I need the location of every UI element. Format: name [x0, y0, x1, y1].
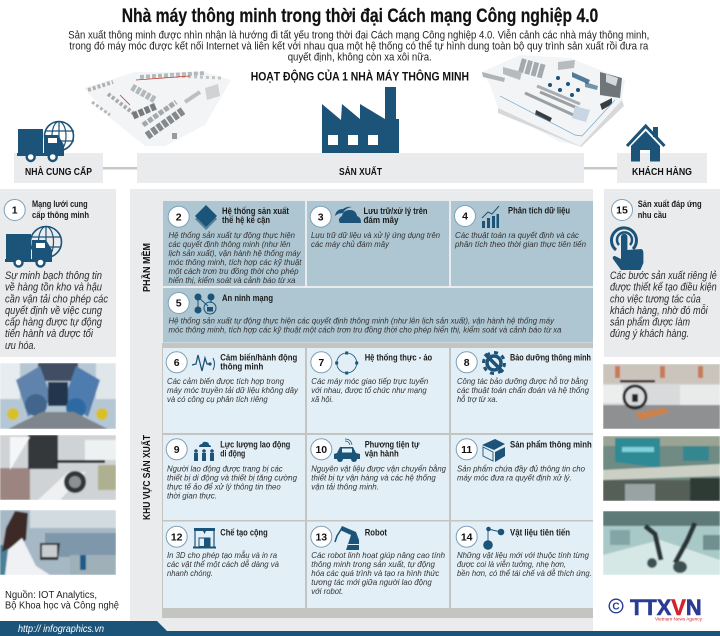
cell 14: Những vật liệu mới với thuộc tính từng [457, 550, 589, 560]
cell 11 [451, 435, 593, 520]
cell 13: với robot. [311, 586, 343, 596]
source note: Nguồn: IOT Analytics, [5, 589, 97, 601]
cell 14: được coi là viễn tưởng, nhẹ hơn, [457, 559, 566, 569]
cell 2: thế hệ kế cận [222, 215, 270, 225]
cell 11: máy móc đưa ra quyết định xử lý. [457, 473, 572, 483]
cell 7: Hệ thống thực - ảo [365, 353, 433, 363]
cell 2: các quyết định thông minh (như lên [168, 239, 291, 249]
cell 12: 12 [171, 531, 183, 543]
cell 8: Công tác bảo dưỡng được hỗ trợ bằng [457, 376, 588, 386]
icon: cyber-physical ring [335, 352, 358, 374]
intro text [68, 28, 649, 63]
cell 2: Hệ thống sản xuất [222, 206, 289, 216]
illustration: factory floor right [482, 55, 625, 147]
cell 6: máy móc truyền tải dữ liệu không dây [167, 385, 299, 395]
icon: truck and globe [5, 226, 62, 266]
logo: TTXVN: TTXVN [630, 595, 702, 620]
cell 9: thời gian thực. [167, 491, 217, 501]
number 1 [4, 200, 25, 220]
cell 8: các thuật toán chẩn đoán và hệ thống [457, 385, 589, 395]
panel: supplier [0, 189, 116, 357]
cell 14 [451, 522, 593, 608]
cell 6: 6 [174, 357, 180, 369]
cell 2 [163, 201, 305, 286]
cell 8 [451, 348, 593, 433]
photo: drone in plant [0, 435, 116, 500]
cell 2: móc thông minh, tích hợp các kỹ thuật [168, 257, 302, 267]
cell 7: 7 [318, 357, 324, 369]
cell 10: vận tải thông minh. [311, 482, 379, 492]
cell 5: 5 [176, 298, 182, 310]
icon: bar chart [482, 206, 499, 228]
cell 4: phân tích theo thời gian thực tiên tiến [454, 239, 586, 249]
cell 10 [307, 435, 449, 520]
icon: network lock [194, 294, 216, 314]
cell 6: và có công cụ phân tích riêng [167, 394, 268, 404]
footer bar: http:// infographics.vn [18, 623, 104, 635]
cell 13: Robot [365, 528, 387, 538]
supplier heading: cấp thông minh [32, 210, 89, 220]
connector bars [103, 167, 618, 170]
photo: robot arms [603, 511, 720, 575]
cell 12: In 3D cho phép tạo mẫu và in ra [167, 550, 277, 560]
cell 4: 4 [462, 211, 468, 223]
photo: engineer at laptop [0, 510, 116, 575]
illustration: factory floor left [84, 72, 231, 146]
logo: TTXVN: Vietnam News Agency [655, 616, 703, 622]
cell 6: Các cảm biến được tích hợp trong [167, 376, 284, 386]
panel: customer [604, 189, 720, 357]
icon: delivery truck with globe [17, 121, 74, 161]
supplier heading [32, 199, 89, 220]
cell 12: các vật thể một cách dễ dàng và [167, 559, 279, 569]
cell 2: một cách trơn tru đồng thời cho phép [168, 266, 299, 276]
photo: robotic assembly line [0, 363, 116, 429]
supplier text: tiến hành và được tối [5, 328, 93, 340]
number 15 [612, 200, 632, 220]
intro text: trong đó máy móc được kết nối Internet và liên kết với nhau qua một hệ thống có thể tự hình dung toàn bộ quy trình sản xuất rồi đưa ra [69, 40, 649, 52]
cell 5: An ninh mạng [222, 293, 273, 303]
cell 10: thiết bị tự vận hàng và các hệ thống [311, 473, 436, 483]
subheading: HOẠT ĐỘNG CỦA 1 NHÀ MÁY THÔNG MINH [251, 70, 469, 83]
header box: supplier: NHÀ CUNG CẤP [25, 165, 92, 178]
customer heading: Sản xuất đáp ứng [638, 199, 702, 209]
cell 4: Các thuật toán ra quyết định và các [455, 230, 580, 240]
icon: touching hand [611, 228, 643, 270]
cell 10: Phương tiện tự [365, 440, 420, 450]
cell 9: thực tế ảo để xử lý thông tin theo [167, 482, 281, 492]
header box: customer: KHÁCH HÀNG [632, 165, 692, 178]
cell 6: thông minh [220, 362, 263, 372]
header box: production: SẢN XUẤT [339, 165, 382, 178]
cell 3 [307, 201, 449, 286]
cell 11: 11 [461, 444, 472, 456]
cell 9: 9 [174, 444, 180, 456]
icon: factory [322, 87, 399, 159]
shop floor label: KHU VỰC SẢN XUẤT [140, 435, 153, 520]
supplier text: quyết định về việc cung [5, 305, 103, 317]
customer text [610, 270, 717, 340]
cell 13: Các robot linh hoạt giúp nâng cao tính [311, 550, 445, 560]
customer text: cho việc tương tác của [610, 293, 701, 305]
cell 7: xã hội. [310, 394, 333, 404]
cell 4 [451, 201, 593, 286]
cell 12 [163, 522, 305, 608]
customer heading [638, 199, 702, 220]
icon: workers under cloud [194, 442, 214, 461]
source note: Bộ Khoa học và Công nghệ [5, 600, 119, 612]
header box: supplier [14, 153, 103, 183]
icon: product box [482, 439, 505, 462]
supplier text: Sự minh bạch thông tin [5, 270, 102, 282]
number 1: 1 [12, 205, 18, 217]
icon: material nodes [483, 527, 504, 550]
cell 9: thiết bị di động và thiết bị tăng cường [167, 473, 297, 483]
cell 3: các máy chủ đám mây [311, 239, 390, 249]
icon: sensor pulse [192, 355, 214, 371]
panel: production background [130, 189, 593, 631]
cell 2: Hệ thống sản xuất tự động thực hiện [168, 230, 295, 240]
cell 6: Cảm biến/hành động [220, 353, 297, 363]
icon: cloud [335, 207, 361, 223]
source note [5, 589, 119, 612]
cell 7 [307, 348, 449, 433]
footer bar [0, 621, 720, 636]
cell 12: Chế tạo cộng [220, 528, 268, 538]
cell 3: 3 [318, 211, 324, 223]
icon: layered diamond [195, 205, 217, 230]
header box: production [137, 153, 584, 183]
intro text: Sản xuất thông minh được nhìn nhận là hướng đi tất yếu trong thời đại Cách mạng Công nghiệp 4.0. Viễn cảnh các nhà máy thông minh, [68, 28, 649, 41]
cell 3: Lưu trữ dữ liệu và xử lý ứng dụng trên [311, 230, 440, 240]
supplier heading: Mạng lưới cung [32, 199, 88, 209]
supplier text [5, 270, 108, 352]
cell 13: 13 [315, 531, 327, 543]
cell 4: Phân tích dữ liệu [508, 206, 570, 216]
cell 10: 10 [315, 444, 327, 456]
cell 10: Nguyên vật liệu được vận chuyển bằng [311, 464, 446, 474]
cell 13 [307, 522, 449, 608]
supplier text: cấp hàng được tự động [5, 316, 103, 328]
customer text: sản phẩm được làm [610, 316, 690, 328]
cell 3: Lưu trữ/xử lý trên [364, 206, 428, 216]
cell 9: Lực lượng lao động [220, 440, 290, 450]
grid backing strip [162, 343, 593, 618]
photo: drone with steering wheel [603, 364, 720, 429]
cell 2: hiển thị, kiểm soát và cảnh báo từ xa [168, 275, 296, 285]
cell 8: 8 [464, 357, 470, 369]
cell 3: đám mây [364, 215, 398, 225]
software label: PHẦN MỀM [140, 243, 153, 292]
cell 13: hóa các quá trình và tạo ra hình thức [311, 568, 440, 578]
header box: customer [617, 153, 707, 183]
icon: robot arm [335, 526, 359, 550]
cell 6 [163, 348, 305, 433]
cell 9: Người lao động được trang bị các [167, 464, 283, 474]
icon: gear and wrench [484, 352, 504, 374]
cell 8: hỗ trợ từ xa. [457, 394, 498, 404]
supplier text: cần vận tải cho phép các [5, 293, 108, 305]
cell 2: lịch sản xuất), vận hành hệ thống máy [168, 248, 301, 258]
cell 9: di động [220, 449, 245, 459]
customer text: đúng ý khách hàng. [610, 328, 689, 340]
cell 7: với nhau, được tổ chức như mạng [311, 385, 427, 395]
cell 14: 14 [461, 531, 473, 543]
cell 9 [163, 435, 305, 520]
icon: autonomous vehicle [334, 439, 360, 462]
logo: TTXVN: C [612, 602, 620, 612]
icon: house [627, 126, 664, 162]
cell 5 [163, 288, 593, 342]
cell 7: Các máy móc giao tiếp trực tuyến [311, 376, 428, 386]
supplier text: về hàng tồn kho và hậu [5, 282, 102, 294]
cell 8: Bảo dưỡng thông minh [510, 353, 591, 363]
cell 14: bền hơn, có thể tái chế và dễ thích ứng. [457, 568, 592, 578]
cell 14: Vật liệu tiên tiến [510, 528, 570, 538]
cell 5: Hệ thống sản xuất tự động thực hiện các quyết định thông minh (như lên lịch sản xuất), vận hành hệ thống máy [168, 316, 555, 326]
customer heading: nhu cầu [638, 210, 667, 220]
cell 13: thông minh trong sản xuất, tự động [311, 559, 435, 569]
cell 2: 2 [176, 211, 182, 223]
cell 11: Sản phẩm chứa đầy đủ thông tin cho [457, 464, 585, 474]
cell 5: móc thông minh, tích hợp các kỹ thuật một cách trơn tru đồng thời cho phép hiển thị, kiểm soát và cảnh báo từ xa [168, 324, 562, 334]
cell 12: nhanh chóng. [167, 568, 213, 578]
cell 10: vận hành [365, 449, 399, 459]
cell 13: tương tác mới giữa người lao động [311, 577, 432, 587]
number 15: 15 [616, 205, 628, 217]
title: Nhà máy thông minh trong thời đại Cách mạng Công nghiệp 4.0 [122, 6, 598, 27]
photo: factory monitors [603, 436, 720, 501]
supplier text: ưu hóa. [5, 340, 36, 352]
intro text: quyết định, không còn xa xôi nữa. [288, 51, 432, 63]
cell 11: Sản phẩm thông minh [510, 440, 592, 450]
icon: 3D printer [193, 528, 216, 548]
